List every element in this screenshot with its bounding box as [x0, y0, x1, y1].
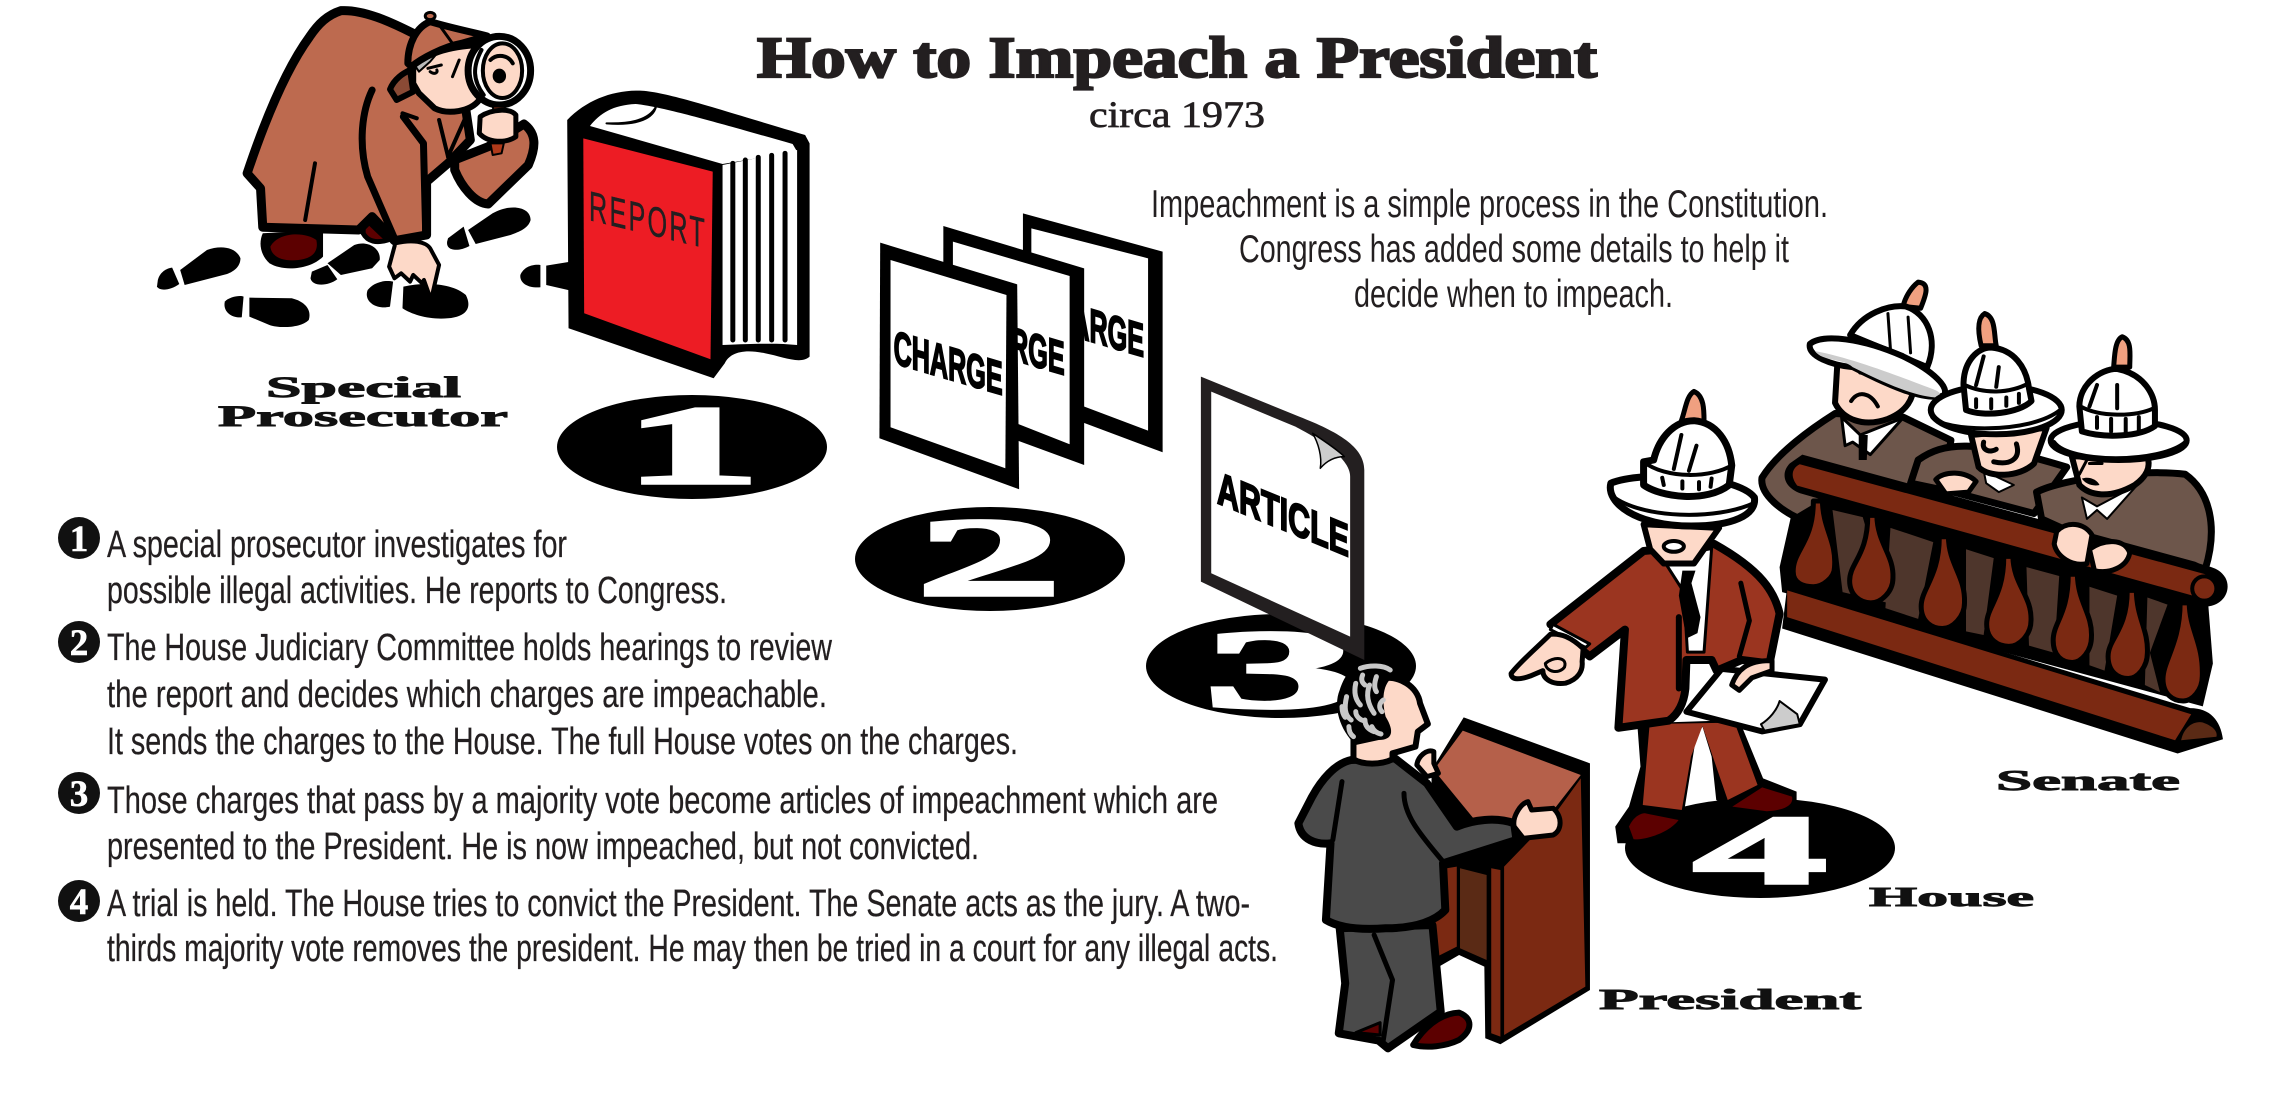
senator 3 jacket — [2037, 473, 2211, 569]
illustration: special prosecutor with magnifying glass — [157, 11, 571, 327]
charge sheet: front — [879, 243, 1019, 489]
label: House: House — [1869, 882, 2034, 912]
senator 2 head — [1971, 428, 2047, 475]
pointing hand — [389, 241, 439, 300]
railing top bar — [1785, 455, 2228, 607]
pointing hand — [1511, 634, 1583, 684]
step 4 text: A trial is held. The House tries to convict the President. The Senate acts as the jury. A two- — [107, 883, 1250, 925]
label: Special Prosecutor: Prosecutor — [218, 400, 508, 433]
step 1 text — [58, 517, 727, 612]
shoes — [1413, 1013, 1469, 1047]
lower bodies behind rail — [1780, 489, 2213, 706]
intro text: Impeachment is a simple process in the Constitution. — [1151, 183, 1828, 226]
senator 1 collar and tie — [1842, 417, 1903, 455]
shirt cuff — [1550, 624, 1590, 647]
step 2 text: It sends the charges to the House. The full House votes on the charges. — [107, 721, 1018, 763]
subtitle: circa 1973 — [1089, 95, 1265, 136]
step 3 badge: 3 — [1204, 607, 1358, 732]
jacket — [1550, 544, 1780, 728]
senator 2 jacket — [1911, 446, 2067, 514]
trousers — [1339, 925, 1441, 1048]
railing balusters — [1793, 501, 2202, 701]
book label: REPORT: REPORT — [589, 183, 705, 258]
president's hands — [1514, 802, 1560, 838]
illustration: Senate jury behind railing — [1762, 282, 2228, 754]
trench coat — [247, 11, 470, 241]
senator 3 head — [2072, 456, 2149, 494]
senator 1 jacket — [1762, 414, 1951, 518]
step 2 badge — [855, 495, 1125, 619]
illustration: House manager holding paper — [1511, 391, 1825, 843]
trousers and shoes — [1615, 720, 1797, 843]
illustration: red report book — [567, 91, 810, 378]
label: Special Prosecutor: Special — [266, 371, 461, 404]
step 2 text: the report and decides which charges are impeachable. — [107, 674, 827, 716]
intro text: decide when to impeach. — [1354, 273, 1673, 316]
step 3 text — [58, 772, 1218, 868]
step 4 text — [58, 880, 1278, 970]
label: Special Prosecutor — [218, 371, 508, 433]
head — [413, 45, 479, 112]
article sheet — [1201, 377, 1364, 660]
step 1 text: 1 — [70, 519, 88, 560]
step 4 text: 4 — [70, 882, 88, 923]
hand on paper — [1732, 661, 1772, 690]
senator 2 capitol-dome hat — [1931, 314, 2062, 434]
curly hair — [1337, 665, 1397, 745]
railing bottom bar — [1782, 587, 2223, 754]
senator 1 capitol-dome hat — [1810, 282, 1945, 397]
step 3 badge — [1146, 607, 1416, 732]
step 4 badge — [1625, 796, 1895, 905]
raised arm — [455, 124, 534, 204]
shirt and tie — [1662, 549, 1712, 652]
deerstalker hat — [408, 22, 487, 67]
paper — [1686, 669, 1825, 731]
step 4 badge: 4 — [1694, 796, 1826, 905]
intro text — [1151, 183, 1828, 316]
step 1 badge: 1 — [623, 384, 761, 508]
charge sheet: middle — [943, 226, 1084, 465]
title: How to Impeach a President — [757, 25, 1598, 90]
step 2 text: The House Judiciary Committee holds hearings to review — [107, 627, 832, 669]
label: Senate: Senate — [1996, 765, 2180, 797]
magnifying glass — [468, 36, 531, 110]
chin and mouth — [1644, 524, 1719, 564]
footprints — [157, 207, 571, 327]
charge sheet: back: CHARGE — [1035, 284, 1144, 368]
step 2 badge: 2 — [916, 495, 1062, 619]
step list — [58, 517, 1278, 970]
step 1 text: A special prosecutor investigates for — [107, 524, 567, 566]
label: President: President — [1599, 985, 1863, 1016]
step 3 text: 3 — [70, 774, 88, 815]
step 3 text: presented to the President. He is now impeached, but not convicted. — [107, 826, 979, 868]
senator 1 head — [1835, 360, 1913, 422]
jacket — [1298, 758, 1516, 929]
charge sheet: front: CHARGE — [894, 322, 1003, 406]
step 2 text — [58, 621, 1018, 763]
lectern — [1432, 717, 1590, 1044]
hand holding glass — [479, 110, 516, 141]
step 1 badge — [557, 384, 827, 508]
capitol-dome hat — [1610, 391, 1755, 526]
step 1 text: possible illegal activities. He reports to Congress. — [107, 570, 727, 612]
step 3 text: Those charges that pass by a majority vote become articles of impeachment which are — [107, 780, 1218, 822]
illustration: President at lectern — [1298, 665, 1590, 1048]
charge sheet: middle: CHARGE — [956, 302, 1065, 386]
charge sheet: back — [1023, 213, 1163, 452]
shoes — [261, 217, 388, 268]
step 2 text: 2 — [70, 623, 88, 664]
senator 3 capitol-dome hat — [2051, 337, 2187, 460]
article sheet: ARTICLE — [1217, 463, 1349, 567]
senators' hands — [1936, 473, 2130, 572]
head — [1353, 678, 1428, 764]
step 4 text: thirds majority vote removes the president. He may then be tried in a court for any illegal acts. — [107, 928, 1278, 970]
intro text: Congress has added some details to help it — [1239, 228, 1789, 271]
